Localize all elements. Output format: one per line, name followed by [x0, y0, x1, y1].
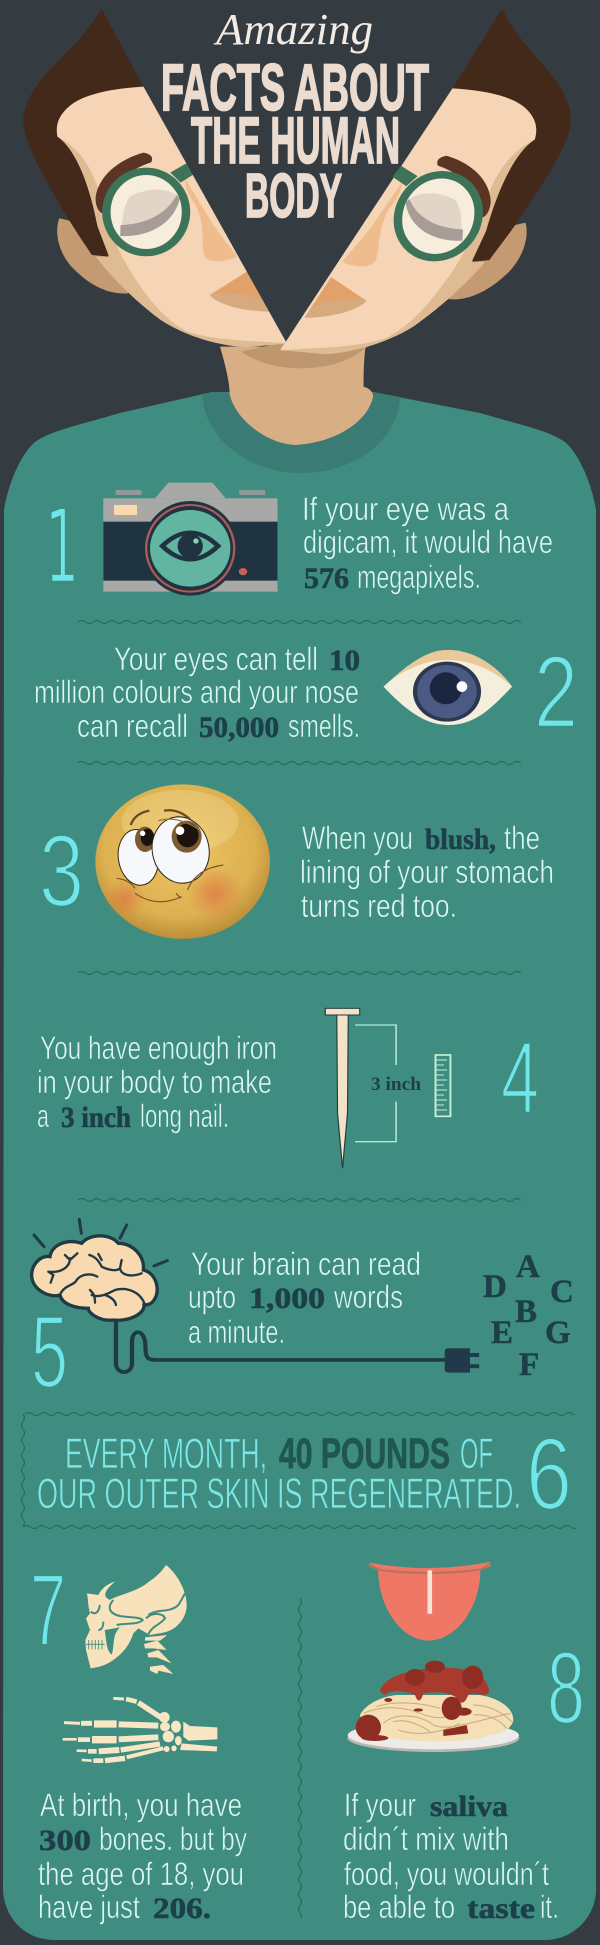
scattered letters: D: [483, 1269, 507, 1305]
fact 2 text: Your eyes can tell: [114, 641, 318, 677]
left half of head: [23, 8, 291, 347]
shirt collar: [202, 392, 400, 473]
scattered letters: E: [491, 1315, 513, 1351]
icon: blushing emoji: [95, 784, 270, 939]
fact 7 text: 300: [39, 1824, 91, 1857]
fact 8 text: saliva: [430, 1790, 508, 1823]
fact 8 text: taste: [467, 1892, 535, 1925]
icon: spaghetti plate: [347, 1661, 519, 1752]
label: 3 inch: 3 inch: [371, 1074, 421, 1095]
fact 3 text: [300, 820, 554, 924]
fact 4 text: 3 inch: [61, 1101, 131, 1134]
fact 2 text: 10: [329, 644, 360, 677]
fact 2 number: 2: [534, 635, 578, 749]
fact 1 text: If your eye was a: [302, 491, 509, 527]
fact 7 text: [38, 1787, 247, 1925]
title: Amazing: Amazing: [213, 5, 373, 54]
fact 1 number: 1: [45, 488, 79, 607]
fact 2 text: 50,000: [199, 711, 279, 744]
fact 6 number: 6: [526, 1417, 572, 1531]
fact 2 text: [34, 641, 360, 744]
icon: hand bones: [63, 1698, 217, 1761]
fact 2 text: smells.: [288, 708, 360, 744]
icon: brain with plug cable: [32, 1219, 479, 1373]
fact 4 text: a: [37, 1098, 49, 1134]
fact 8 text: If your: [344, 1787, 416, 1823]
fact 7 text: have just: [38, 1889, 140, 1925]
fact 5 text: 1,000: [249, 1282, 325, 1315]
icon: camera with eye: [103, 483, 277, 596]
icon: skull and neck bones: [85, 1565, 187, 1674]
panel: shirt body: [3, 392, 596, 1940]
fact 6 frame: [20, 1411, 576, 1530]
fact 3 text: the: [504, 820, 540, 856]
right half of head: [280, 8, 581, 354]
fact 5 text: Your brain can read: [191, 1246, 421, 1282]
fact 3 text: When you: [302, 820, 413, 856]
fact 5 text: upto: [188, 1279, 236, 1315]
fact 5 text: words: [333, 1279, 403, 1315]
fact 1 text: 576: [304, 562, 349, 595]
fact 4 text: long nail.: [140, 1098, 229, 1134]
title: body: BODY: [245, 162, 342, 231]
scattered letters: C: [550, 1274, 574, 1310]
fact 7 text: At birth, you have: [40, 1787, 242, 1823]
fact 7 number: 7: [30, 1553, 66, 1667]
icon: tongue: [369, 1562, 491, 1641]
title: the human: THE HUMAN: [191, 103, 400, 177]
fact 5 number: 5: [31, 1295, 68, 1409]
fact 5 text: [188, 1246, 421, 1350]
fact 6 text: [37, 1430, 521, 1518]
fact 8 text: [343, 1787, 559, 1925]
fact 8 text: be able to: [343, 1889, 455, 1925]
fact 7 text: the age of 18, you: [38, 1856, 244, 1892]
fact 3 number: 3: [39, 814, 84, 928]
title: [161, 5, 429, 231]
scattered letters: A: [516, 1249, 540, 1285]
fact 3 text: turns red too.: [301, 888, 457, 924]
fact 4 text: [37, 1030, 277, 1134]
fact 6 text: EVERY MONTH,: [65, 1430, 267, 1478]
fact 6 text: 40 POUNDS: [279, 1430, 450, 1478]
fact 7 text: bones. but by: [99, 1821, 247, 1857]
fact 2 text: can recall: [77, 708, 188, 744]
fact 7 text: 206.: [153, 1892, 211, 1925]
scattered letters: B: [515, 1294, 537, 1330]
fact 6 text: OF: [460, 1430, 493, 1478]
scattered letters: G: [545, 1315, 571, 1351]
scattered letters: [483, 1249, 574, 1383]
fact 8 text: food, you wouldn´t: [344, 1856, 549, 1892]
fact 5 text: a minute.: [188, 1314, 285, 1350]
chin shadow: [241, 342, 367, 368]
fact 8 text: it.: [540, 1889, 559, 1925]
fact 2 text: million colours and your nose: [34, 674, 359, 710]
scattered letters: F: [519, 1347, 539, 1383]
icon: human eye: [383, 650, 512, 725]
fact 3 text: blush,: [425, 823, 496, 856]
neck: [220, 347, 373, 445]
centre triangle: [101, 0, 501, 342]
fact 1 text: [302, 491, 553, 595]
fact 4 number: 4: [501, 1021, 539, 1135]
fact 1 text: megapixels.: [357, 559, 481, 595]
fact 4 text: in your body to make: [37, 1064, 272, 1100]
illustration: split face: [23, 0, 581, 445]
fact 4 text: You have enough iron: [40, 1030, 277, 1066]
fact 8 text: didn´t mix with: [343, 1821, 509, 1857]
icon: nail with measurement: [325, 1008, 450, 1168]
